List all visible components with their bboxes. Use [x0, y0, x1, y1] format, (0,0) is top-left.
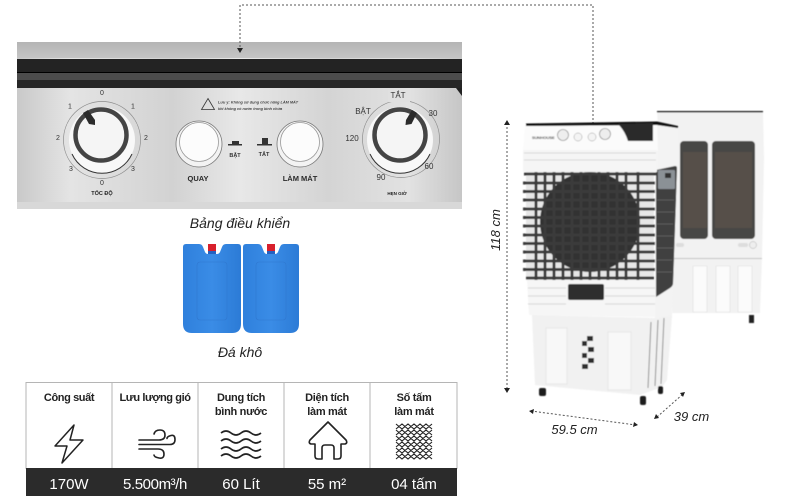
speed dial	[56, 90, 148, 197]
speed dial: TỐC ĐỘ	[91, 189, 113, 197]
column: power	[44, 392, 95, 493]
water tank base	[532, 315, 672, 395]
spec table	[26, 382, 457, 496]
button: lam mat	[277, 121, 323, 183]
column: pads	[391, 392, 437, 493]
dotted connector arrow	[237, 5, 593, 128]
timer dial: 30	[429, 109, 438, 118]
timer dial: 120	[345, 134, 359, 143]
switch legend: TẮT	[259, 150, 270, 158]
speed dial: 2	[56, 135, 60, 142]
column: area: Diện tích	[305, 392, 349, 404]
column: tank	[215, 392, 267, 493]
column: tank: 60 Lít	[222, 476, 261, 493]
timer dial: BẬT	[355, 107, 371, 116]
speed dial: 1	[131, 104, 135, 110]
speed dial: 2	[144, 135, 148, 142]
top control strip	[523, 122, 658, 151]
column: airflow: 5.500m³/h	[123, 476, 187, 493]
warning note	[202, 98, 299, 111]
dimension: height	[488, 120, 510, 393]
column: pads: 04 tấm	[391, 476, 437, 493]
column: area	[305, 392, 349, 493]
dimension: width: 59.5 cm	[551, 422, 598, 437]
product: rear view cooler	[657, 111, 764, 323]
upper housing	[523, 150, 657, 172]
panel: control panel photo	[17, 42, 462, 209]
warning note: khi không có nước trong bình chứa	[218, 107, 282, 111]
timer dial: 90	[377, 173, 386, 182]
column: airflow	[119, 392, 191, 493]
product: front view cooler	[523, 122, 678, 405]
column: area: làm mát	[307, 406, 347, 418]
dimension: depth	[654, 392, 709, 424]
dimension: depth: 39 cm	[674, 409, 709, 424]
speed dial: 0	[100, 90, 104, 97]
louvered grille	[526, 172, 654, 280]
column: tank: Dung tích	[217, 392, 266, 404]
timer dial: TẮT	[390, 91, 406, 100]
caption: ice packs: Đá khô	[218, 344, 262, 360]
speed dial: 3	[131, 166, 135, 173]
switch legend	[228, 138, 272, 159]
side panel	[655, 124, 678, 318]
product: front view cooler: SUNHOUSE	[532, 135, 555, 140]
column: pads: làm mát	[394, 406, 434, 418]
speed dial: 1	[68, 104, 72, 110]
column: area: 55 m²	[308, 476, 346, 493]
switch legend: BẬT	[229, 152, 241, 159]
timer dial: HẸN GIỜ	[387, 189, 407, 196]
warning note: Lưu ý: Không sử dụng chức năng LÀM MÁT	[218, 100, 299, 104]
icon: ice packs	[183, 244, 299, 333]
button: quay	[176, 121, 222, 183]
lower housing	[527, 280, 655, 317]
wheels	[539, 388, 546, 396]
column: airflow: Lưu lượng gió	[119, 392, 191, 404]
button: quay: QUAY	[188, 174, 208, 183]
column: tank: bình nước	[215, 406, 267, 418]
caption: control panel: Bảng điều khiển	[190, 215, 290, 231]
dimension: height: 118 cm	[488, 209, 503, 251]
column: power: 170W	[49, 476, 89, 493]
column: power: Công suất	[44, 392, 95, 404]
speed dial: 3	[69, 166, 73, 173]
speed dial: 0	[100, 180, 104, 187]
timer dial	[345, 90, 440, 196]
column: pads: Số tấm	[397, 392, 432, 404]
button: lam mat: LÀM MÁT	[283, 174, 318, 183]
dimension: width	[529, 409, 638, 437]
timer dial: 60	[425, 162, 434, 171]
